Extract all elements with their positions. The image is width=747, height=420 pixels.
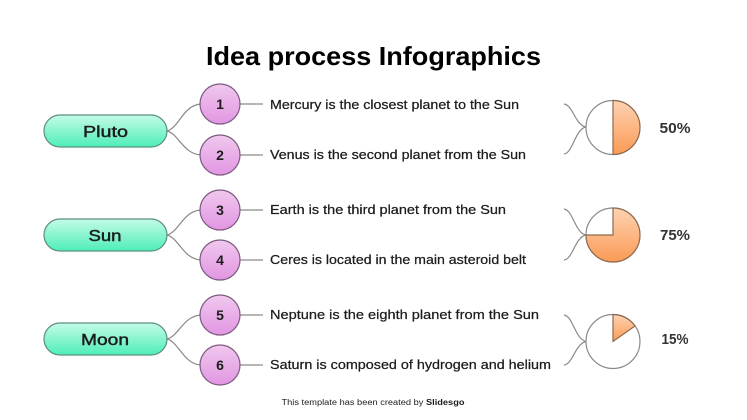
text 1: Mercury is the closest planet to the Sun bbox=[270, 97, 519, 112]
circle 2: 2 bbox=[216, 147, 224, 163]
circle 3 bbox=[200, 190, 240, 230]
title: Idea process Infographics bbox=[206, 41, 541, 71]
pill: Pluto bbox=[44, 115, 167, 147]
circle 3: 3 bbox=[216, 202, 224, 218]
label: 50%: 50% bbox=[660, 121, 691, 137]
circle 4 bbox=[200, 240, 240, 280]
connectors: Pluto bbox=[167, 104, 263, 155]
pill: Sun: Sun bbox=[88, 228, 122, 245]
label: 15%: 15% bbox=[662, 332, 689, 348]
pill: Moon bbox=[44, 323, 167, 355]
text 3: Earth is the third planet from the Sun bbox=[270, 202, 506, 217]
text 2: Venus is the second planet from the Sun bbox=[270, 147, 526, 162]
circle 5 bbox=[200, 295, 240, 335]
connectors: Sun bbox=[167, 210, 263, 260]
pie chart: 15% bbox=[564, 314, 640, 368]
circle 1: 1 bbox=[216, 96, 224, 112]
group: Moon bbox=[44, 295, 551, 385]
pill: Pluto: Pluto bbox=[83, 124, 128, 141]
text 5: Neptune is the eighth planet from the Sun bbox=[270, 307, 539, 322]
text 6: Saturn is composed of hydrogen and helium bbox=[270, 357, 551, 372]
group: Sun bbox=[44, 190, 526, 280]
pill: Moon: Moon bbox=[81, 332, 129, 349]
circle 2 bbox=[200, 135, 240, 175]
text 4: Ceres is located in the main asteroid belt bbox=[270, 252, 526, 267]
pie chart: 50% bbox=[564, 100, 640, 154]
circle 4: 4 bbox=[216, 252, 224, 268]
circle 6: 6 bbox=[216, 357, 224, 373]
pie chart: 75% bbox=[564, 208, 640, 262]
circle 6 bbox=[200, 345, 240, 385]
connectors: Moon bbox=[167, 315, 263, 365]
circle 1 bbox=[200, 84, 240, 124]
label: 75%: 75% bbox=[660, 228, 690, 244]
pill: Sun bbox=[44, 219, 167, 251]
footer credit: This template has been created by Slidesgo bbox=[282, 398, 465, 407]
group: Pluto bbox=[44, 84, 526, 175]
circle 5: 5 bbox=[216, 307, 224, 323]
